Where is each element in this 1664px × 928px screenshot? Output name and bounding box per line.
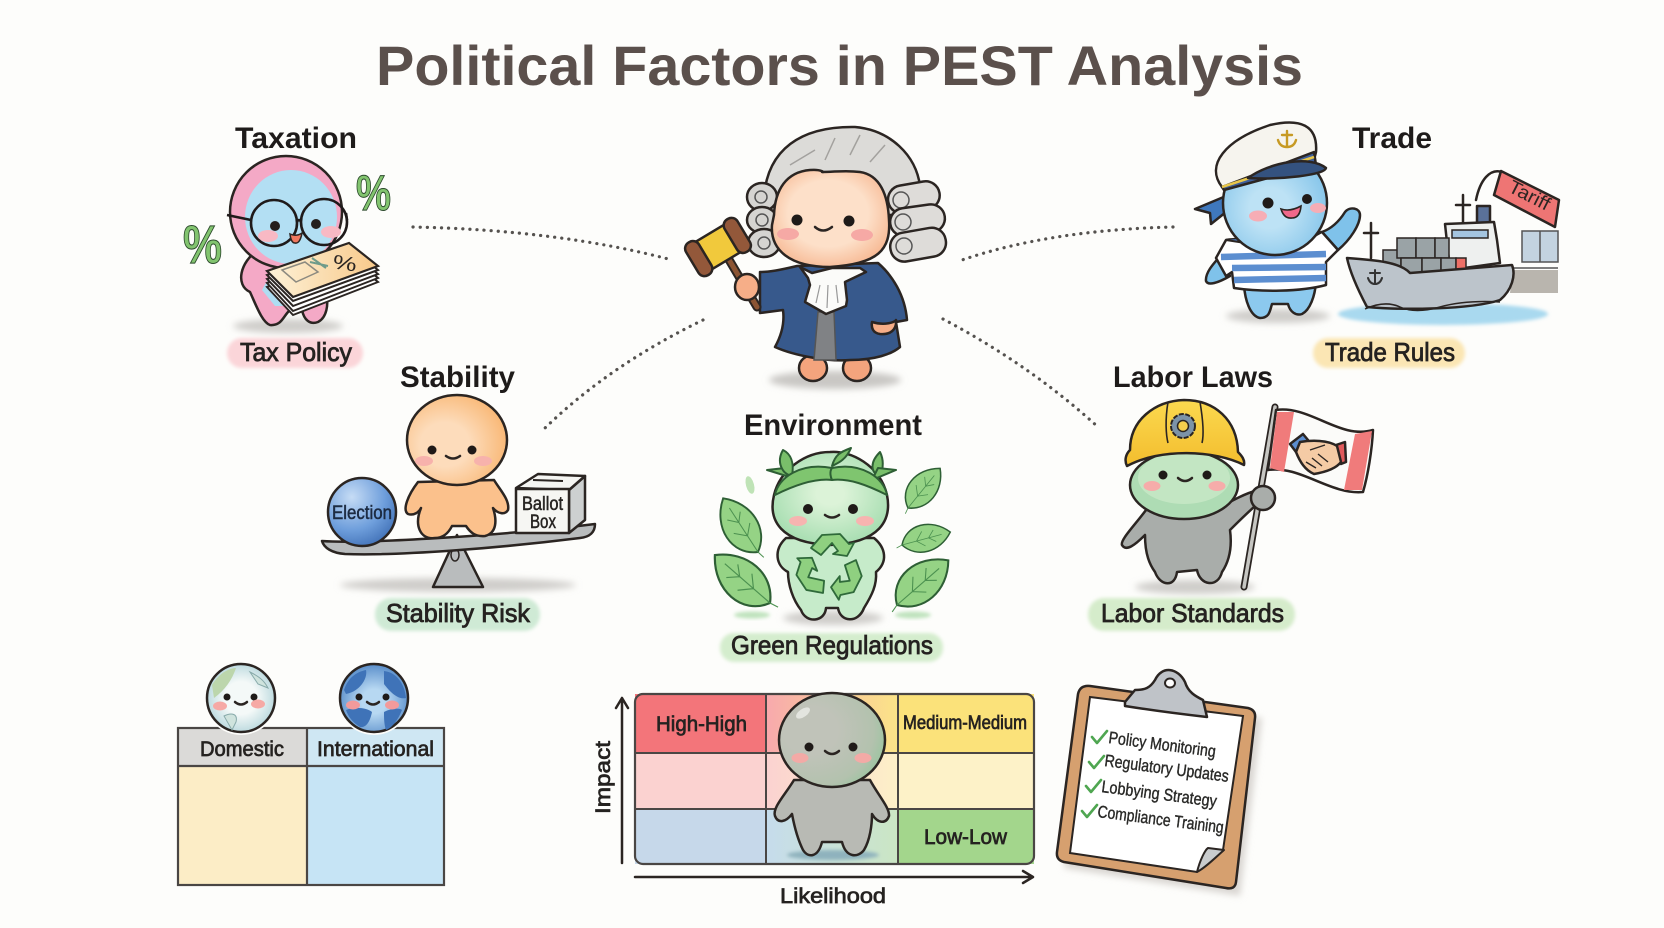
label pill: Trade Rules: Trade Rules bbox=[1325, 337, 1455, 367]
text: Medium-Medium: Medium-Medium bbox=[903, 713, 1027, 734]
label pill: Stability Risk: Stability Risk bbox=[386, 598, 531, 628]
text: Policy Monitoring bbox=[1092, 728, 1217, 761]
panel: compliance clipboard bbox=[1057, 670, 1262, 896]
label pill: Labor Standards: Labor Standards bbox=[1101, 598, 1284, 628]
icon: fulcrum bbox=[433, 535, 483, 587]
label pill: Green Regulations: Green Regulations bbox=[731, 630, 933, 660]
panel: risk matrix bbox=[592, 693, 1034, 908]
icon: bandana bbox=[1195, 196, 1226, 224]
panel: Taxation character bbox=[183, 156, 391, 333]
label tag: Tariff bbox=[1494, 171, 1559, 227]
arrow: impact axis bbox=[616, 698, 628, 863]
text: Lobbying Strategy: Lobbying Strategy bbox=[1100, 777, 1218, 811]
icon: yellow hard hat bbox=[1126, 400, 1244, 466]
icon: Election ball: Election bbox=[332, 503, 392, 524]
icon: stack of tax documents bbox=[267, 243, 378, 315]
icon: grey character bbox=[775, 693, 889, 860]
text: Likelihood axis label: Likelihood bbox=[780, 885, 886, 908]
icon: percent sign right: % bbox=[356, 165, 391, 221]
panel: Labor character with flag bbox=[1122, 400, 1373, 594]
text: International header: International bbox=[317, 738, 434, 761]
text: Impact axis label: Impact bbox=[592, 741, 615, 814]
heading: Trade: Trade bbox=[1352, 122, 1432, 155]
icon: flag pole bbox=[1244, 407, 1275, 587]
text: Regulatory Updates: Regulatory Updates bbox=[1103, 751, 1230, 786]
icon: seesaw beam bbox=[322, 524, 595, 554]
arrow: dotted connector to Stability bbox=[545, 320, 703, 428]
arrow: likelihood axis bbox=[635, 871, 1033, 883]
icon: leaf crown bbox=[767, 448, 896, 495]
arrow: dotted connector to Taxation bbox=[413, 227, 672, 260]
icon: percent sign left: % bbox=[183, 215, 222, 275]
panel: central judge character bbox=[682, 127, 948, 389]
icon: handshake flag bbox=[1268, 410, 1373, 492]
icon: glasses bbox=[227, 199, 347, 246]
heading: Labor Laws: Labor Laws bbox=[1113, 361, 1273, 394]
icon: captain hat bbox=[1216, 122, 1326, 190]
label pill: Tax Policy: Tax Policy bbox=[240, 337, 352, 367]
panel: sailor character bbox=[1195, 122, 1360, 323]
icon: face bbox=[772, 170, 889, 267]
heading: Taxation: Taxation bbox=[235, 122, 357, 155]
text: Compliance Training: Compliance Training bbox=[1096, 802, 1225, 837]
text: Domestic header: Domestic bbox=[200, 738, 284, 761]
text: Policy Monitoring: Policy Monitoring bbox=[1107, 728, 1217, 761]
icon: Ballot Box: Ballot bbox=[522, 494, 564, 515]
icon: domestic globe bbox=[204, 661, 278, 735]
icon: stack of tax documents: % bbox=[331, 251, 358, 277]
arrow: dotted connector to Trade bbox=[962, 227, 1173, 260]
icon: striped shirt bbox=[1216, 232, 1338, 291]
text: Compliance Training bbox=[1082, 802, 1225, 837]
text: Low-Low: Low-Low bbox=[924, 826, 1008, 849]
icon: blue robe bbox=[760, 263, 907, 360]
icon: clipboard clip bbox=[1125, 670, 1207, 717]
panel: Environment character bbox=[701, 448, 960, 625]
chart: matrix cells bbox=[635, 694, 1034, 864]
panel: Stability balance scene bbox=[322, 395, 595, 592]
icon: recycling symbol bbox=[789, 534, 868, 604]
panel: Domestic vs International table bbox=[178, 661, 444, 885]
icon: Election ball bbox=[328, 478, 396, 546]
icon: stacked containers bbox=[1383, 238, 1466, 274]
text: High-High: High-High bbox=[656, 713, 747, 736]
icon: Ballot Box: Box bbox=[530, 512, 556, 533]
heading: Environment: Environment bbox=[744, 409, 922, 442]
heading: Stability: Stability bbox=[400, 361, 515, 394]
icon: wig bbox=[747, 127, 948, 264]
icon: orange character bbox=[406, 395, 508, 538]
icon: cargo ship at dock bbox=[1338, 171, 1559, 325]
label tag: Tariff: Tariff bbox=[1505, 177, 1554, 216]
icon: leaves bbox=[701, 459, 960, 624]
arrow: dotted connector to Labor Laws bbox=[943, 319, 1098, 427]
icon: gavel bbox=[682, 215, 759, 307]
title: Political Factors in PEST Analysis bbox=[376, 34, 1303, 97]
icon: international globe bbox=[337, 661, 411, 735]
icon: Ballot Box bbox=[516, 474, 585, 533]
